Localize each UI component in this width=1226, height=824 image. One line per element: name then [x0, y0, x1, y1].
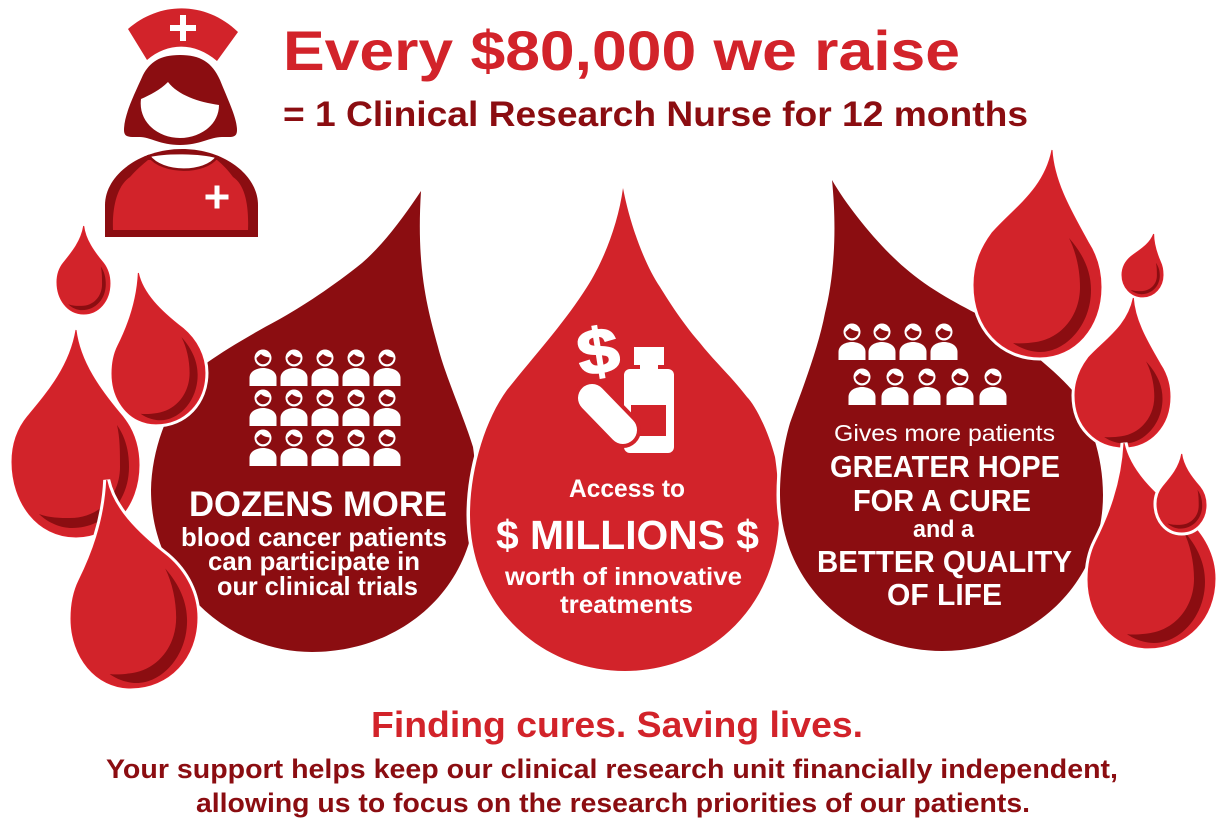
closing text	[106, 754, 1118, 818]
panel text: Gives more patients	[834, 420, 1055, 446]
panel text: our clinical trials	[217, 571, 418, 601]
decorative drops right	[974, 150, 1215, 648]
uniform fill	[113, 160, 248, 230]
panel text: Access to	[569, 475, 685, 503]
panel: greater hope	[780, 180, 1103, 651]
closing text: allowing us to focus on the research priorities of our patients.	[196, 788, 1030, 818]
dark drop right	[780, 180, 1103, 651]
hat cross	[170, 15, 196, 41]
panel text: and a	[913, 516, 975, 543]
center drop	[470, 188, 779, 671]
subheading: = 1 Clinical Research Nurse for 12 months	[283, 95, 1028, 134]
tagline: Finding cures. Saving lives.	[371, 704, 863, 745]
patients icon rows	[838, 324, 1006, 405]
nurse hair	[124, 55, 237, 145]
panel text: blood cancer patients	[181, 522, 447, 552]
panel: access to millions	[470, 188, 779, 671]
panel text: OF LIFE	[887, 577, 1002, 612]
uniform outline	[105, 149, 258, 237]
dark drop left	[151, 191, 476, 652]
panel text	[496, 475, 759, 619]
panel text	[817, 420, 1072, 612]
panel text: treatments	[560, 591, 693, 619]
panel text: GREATER HOPE	[830, 449, 1060, 484]
nurse face	[141, 82, 219, 138]
closing text: Your support helps keep our clinical research unit financially independent,	[106, 754, 1118, 784]
uniform neckline	[149, 153, 217, 170]
panel text: $ MILLIONS $	[496, 512, 759, 558]
heading: Every $80,000 we raise	[283, 19, 960, 82]
panel text: can participate in	[208, 546, 420, 576]
nurse hat	[128, 8, 238, 61]
icon: money and medicine: $	[572, 312, 624, 390]
panel: dozens more patients	[151, 191, 476, 652]
panel text: DOZENS MORE	[189, 485, 447, 524]
uniform cross	[206, 186, 228, 208]
icon: money and medicine	[572, 312, 674, 453]
nurse illustration	[105, 8, 258, 237]
patients icon grid	[250, 350, 400, 466]
panel text: FOR A CURE	[853, 483, 1031, 518]
panel text: BETTER QUALITY	[817, 544, 1072, 579]
panel text: worth of innovative	[504, 563, 742, 591]
panel text	[181, 485, 447, 601]
decorative drops left	[12, 226, 205, 688]
